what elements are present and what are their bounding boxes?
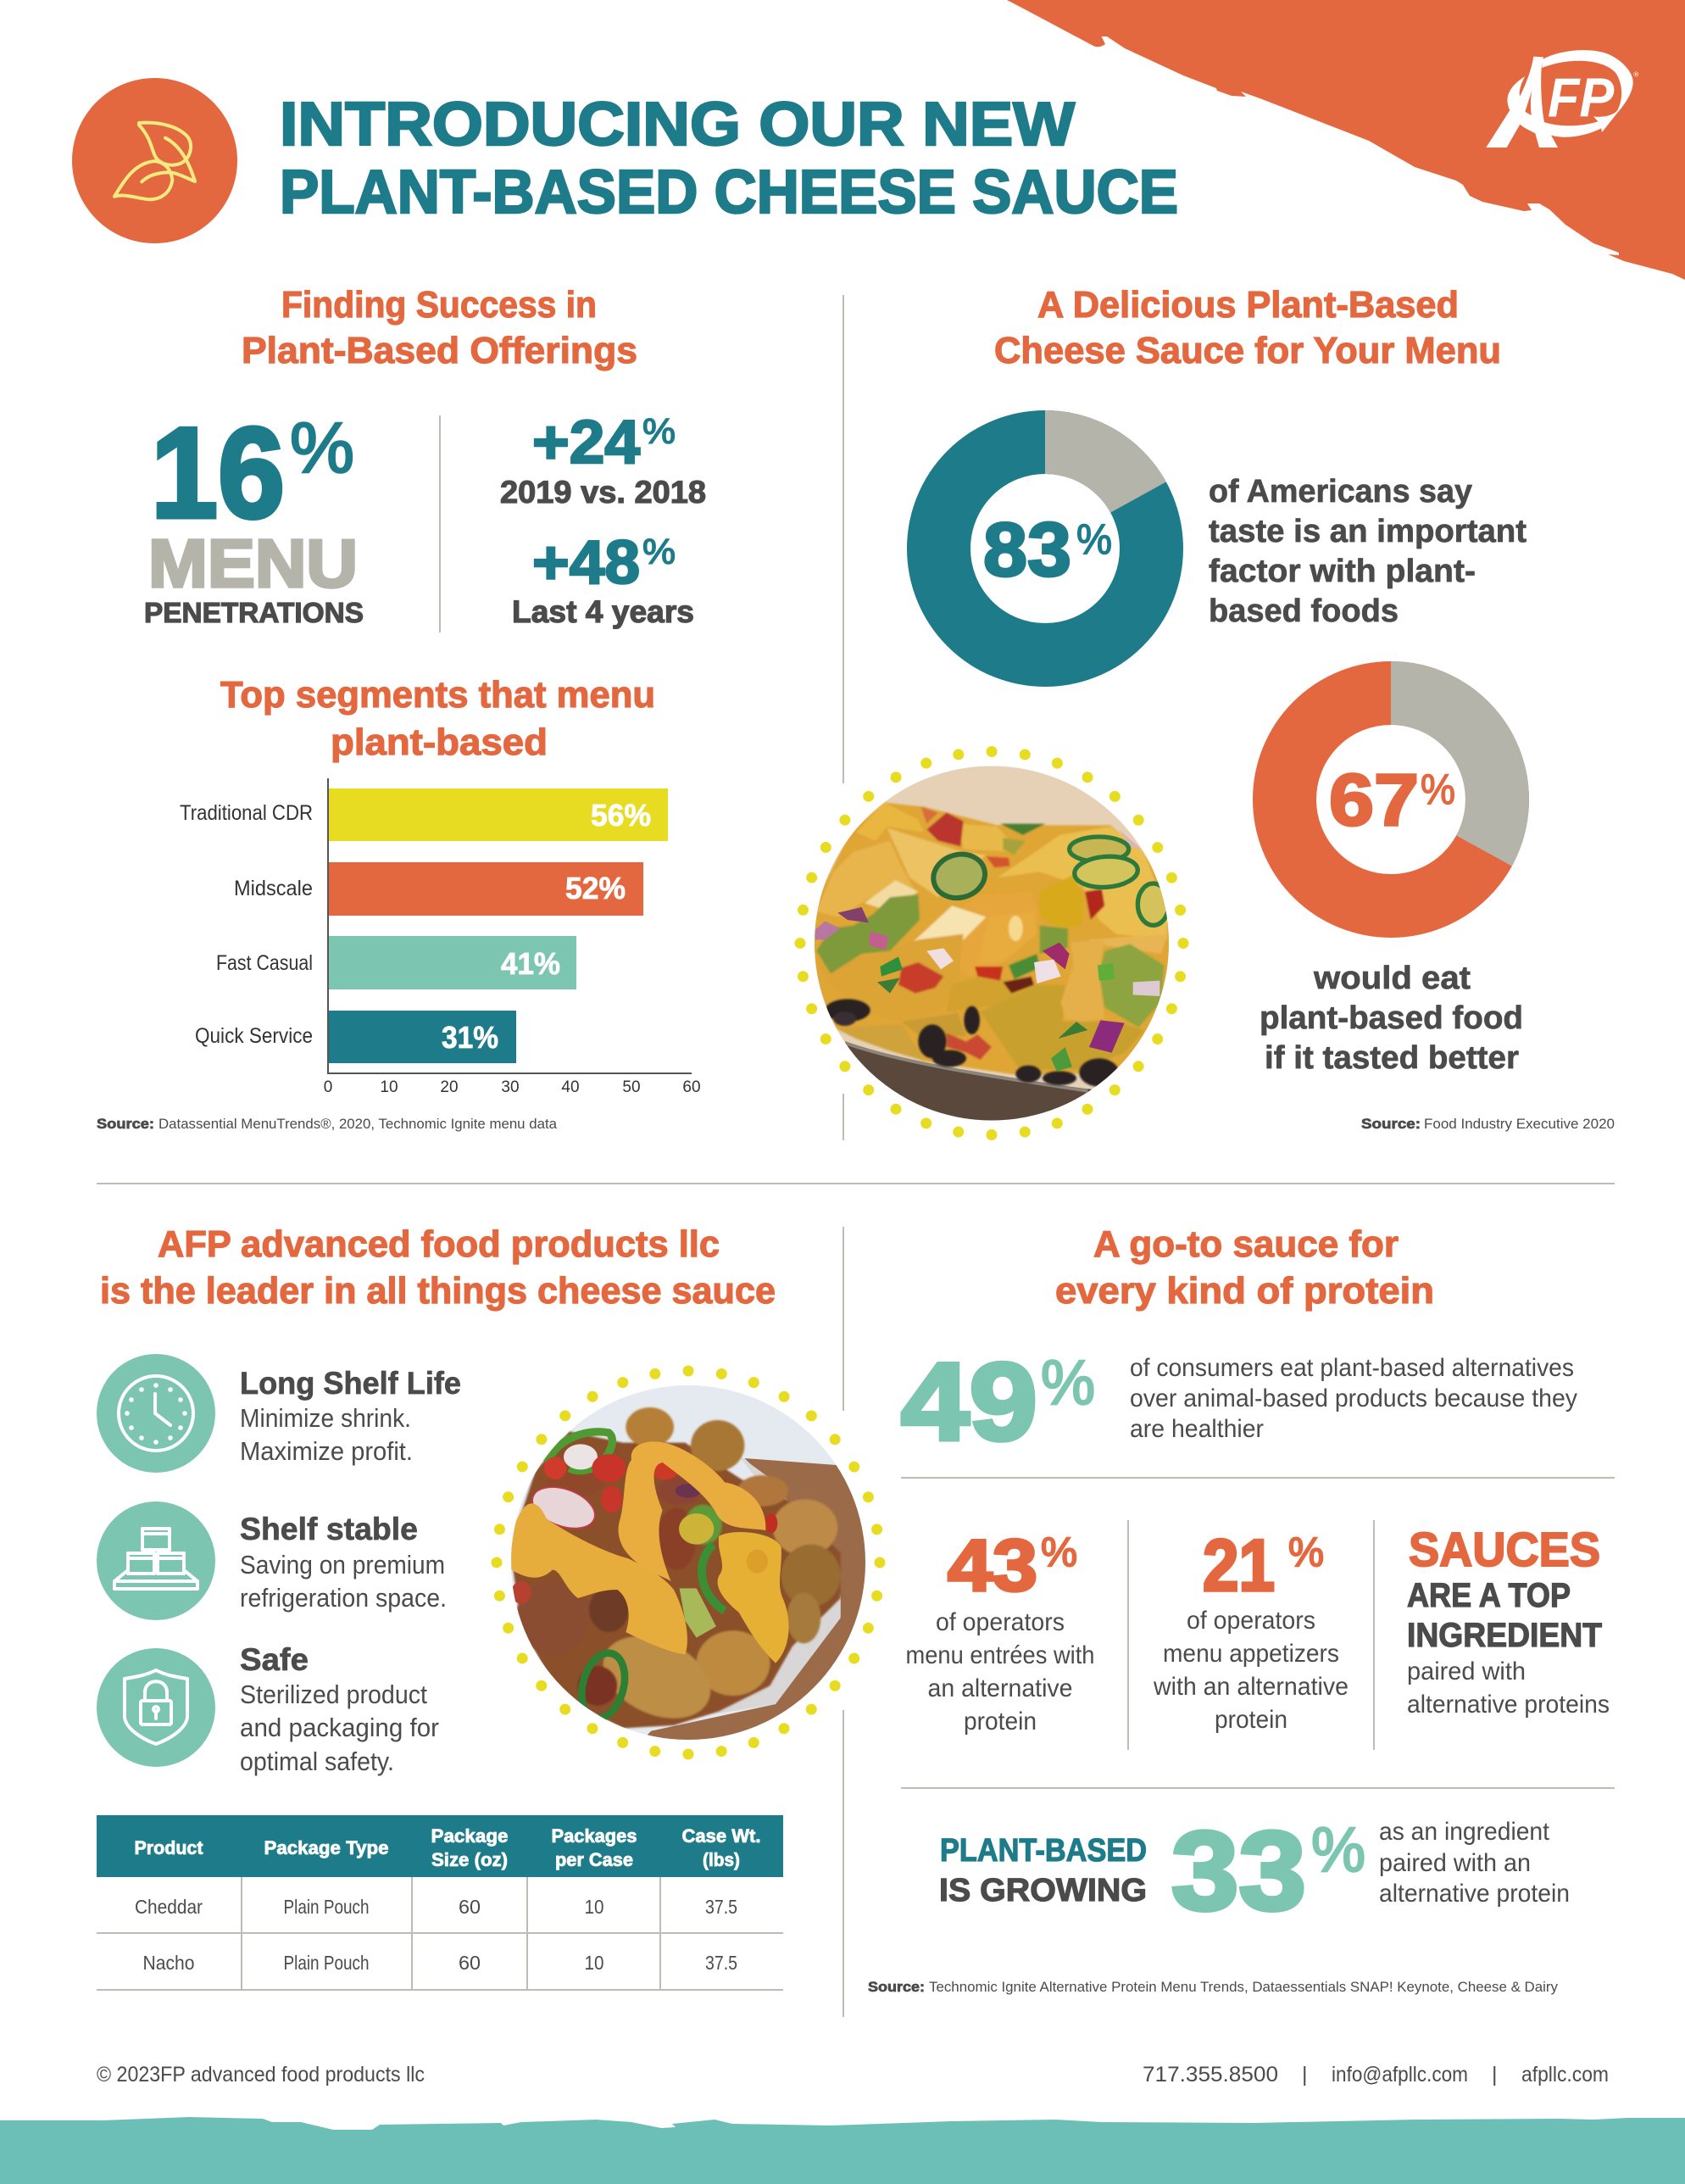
logo: AFP: ®	[1633, 71, 1638, 79]
icon: shield with lock	[97, 1648, 215, 1767]
table rows: Nacho	[142, 1952, 195, 1974]
stat: +48%: %	[642, 532, 676, 571]
table rows: Plain Pouch	[283, 1896, 370, 1918]
orange torn corner banner	[1007, 0, 1685, 280]
stat: 16% menu penetrations: MENU	[148, 526, 358, 601]
table header: Size (oz)	[431, 1849, 508, 1870]
bar: quick service: Quick Service	[195, 1024, 313, 1048]
logo: AFP: FP	[1548, 66, 1615, 128]
text: shelf stable: Saving on premium	[240, 1550, 445, 1580]
teal torn footer band	[0, 2117, 1685, 2184]
stat: 49%: of consumers eat plant-based alternatives	[1130, 1354, 1574, 1382]
source: datassential: Source:	[97, 1116, 154, 1132]
donut chart: 67%: 67	[1329, 760, 1419, 841]
stat: plant-based 33%: 33	[1171, 1808, 1306, 1933]
heading: finding success: Finding Success in	[281, 284, 597, 326]
stat: +24%	[500, 409, 706, 510]
heading: AFP leader: is the leader in all things cheese sauce	[100, 1270, 776, 1312]
heading: AFP leader: AFP advanced food products llc	[158, 1223, 720, 1265]
heading: AFP leader	[100, 1223, 776, 1312]
bar: traditional CDR: Traditional CDR	[180, 801, 313, 825]
text: shelf stable: refrigeration space.	[240, 1583, 447, 1613]
text: safe: optimal safety.	[240, 1747, 394, 1776]
source: food industry: Food Industry Executive 2020	[1424, 1116, 1615, 1132]
table header: Product	[134, 1837, 203, 1858]
panel: top segments chart	[97, 674, 701, 1132]
donut chart: 67%: %	[1421, 766, 1455, 813]
stat: 49%: %	[1041, 1347, 1095, 1418]
text: would eat plant-based food	[1260, 961, 1523, 1076]
heading: go-to sauce	[1055, 1223, 1434, 1312]
heading: finding success: Plant-Based Offerings	[242, 330, 637, 371]
heading: top segments: plant-based	[331, 722, 548, 763]
stat: 21%: menu appetizers	[1163, 1640, 1339, 1668]
bar: fast casual	[216, 936, 576, 989]
stat: 16% menu penetrations: PENETRATIONS	[144, 597, 364, 628]
panel: delicious cheese sauce	[939, 284, 1615, 1132]
stat: 49%: over animal-based products because they	[1130, 1384, 1577, 1412]
plate and beans	[845, 1043, 1092, 1121]
table rows: 10	[585, 1952, 603, 1974]
table rows: 10	[585, 1896, 603, 1918]
text: would eat plant-based food: if it tasted better	[1265, 1040, 1519, 1076]
stat: 43%: menu entrées with	[905, 1641, 1095, 1669]
table header: Case Wt.	[681, 1825, 761, 1847]
chart axis ticks: 40	[561, 1078, 580, 1096]
title: INTRODUCING OUR NEW	[280, 91, 1075, 159]
donut chart: 83%	[939, 410, 1166, 655]
text: shelf stable: Shelf stable	[240, 1512, 418, 1546]
stat: plant-based 33%: PLANT-BASED	[940, 1833, 1147, 1869]
panel: go-to sauce for protein	[868, 1223, 1615, 1995]
text: americans say taste: taste is an important	[1209, 514, 1527, 549]
table rows: Cheddar	[135, 1896, 203, 1918]
stat: sauces top ingredient: ARE A TOP	[1407, 1577, 1571, 1614]
logo: AFP	[1486, 50, 1638, 148]
stat: 16% menu penetrations: 16	[151, 401, 285, 545]
table header: (lbs)	[703, 1849, 740, 1870]
text: would eat plant-based food: would eat	[1313, 961, 1471, 996]
table rows: 60	[459, 1952, 481, 1974]
table rows: Plain Pouch	[283, 1952, 370, 1974]
bar: quick service	[195, 1011, 516, 1063]
heading: go-to sauce: every kind of protein	[1055, 1270, 1434, 1312]
stat: sauces top ingredient: SAUCES	[1409, 1523, 1600, 1577]
stat: sauces top ingredient: paired with	[1407, 1658, 1526, 1685]
footer contact: afpllc.com	[1521, 2063, 1609, 2086]
text: would eat plant-based food: plant-based food	[1260, 1000, 1523, 1036]
footer copyright: © 2023FP advanced food products llc	[97, 2063, 425, 2086]
footer contact: |	[1302, 2063, 1307, 2086]
table rows: 37.5	[705, 1952, 737, 1974]
bar: traditional CDR: 56%	[591, 798, 651, 833]
table header: Package Type	[264, 1837, 388, 1858]
donut chart: 83%: 83	[983, 508, 1071, 593]
bar: fast casual: Fast Casual	[216, 951, 313, 975]
heading: top segments	[220, 674, 655, 763]
text: long shelf life: Long Shelf Life	[240, 1366, 461, 1401]
stat: plant-based 33%: as an ingredient	[1379, 1818, 1550, 1846]
stat: 21%: %	[1288, 1530, 1324, 1575]
text: americans say taste: based foods	[1209, 593, 1399, 629]
bar: traditional CDR	[180, 788, 668, 841]
table rows: 60	[459, 1896, 481, 1918]
stat: plant-based 33%: IS GROWING	[939, 1873, 1147, 1908]
donut chart: 67%	[1285, 661, 1529, 905]
icon: stacked jars	[97, 1502, 215, 1620]
chart axis ticks: 0	[324, 1078, 332, 1096]
stat: 21%: of operators	[1187, 1607, 1315, 1635]
table header: Packages	[551, 1825, 637, 1847]
panel: finding success	[144, 284, 706, 632]
source: food industry: Source:	[1361, 1116, 1421, 1132]
stat: 49%: are healthier	[1130, 1415, 1264, 1443]
stat: 21%: protein	[1215, 1706, 1287, 1734]
text: long shelf life: Maximize profit.	[240, 1436, 413, 1466]
stat: 43%: of operators	[936, 1608, 1065, 1636]
chart axis ticks: 10	[380, 1078, 398, 1096]
bar: midscale: 52%	[565, 871, 626, 905]
source: datassential: Datassential MenuTrends®, 2020, Technomic Ignite menu data	[158, 1116, 558, 1132]
text: americans say taste: of Americans say	[1209, 474, 1472, 510]
footer contact: info@afpllc.com	[1332, 2063, 1468, 2086]
table rows: 37.5	[705, 1896, 737, 1918]
stat: 21%: with an alternative	[1153, 1673, 1349, 1701]
table header: Package	[431, 1825, 509, 1847]
icon: clock	[97, 1354, 215, 1473]
footer contact	[1143, 2063, 1609, 2086]
text: shelf stable	[240, 1512, 447, 1613]
photo: crispy bites with dotted ring	[497, 1371, 880, 1754]
heading: delicious sauce	[994, 284, 1501, 371]
stat: 43%: %	[1041, 1530, 1077, 1575]
text: americans say taste	[1209, 474, 1527, 629]
chart axis ticks: 30	[501, 1078, 520, 1096]
title: PLANT-BASED CHEESE SAUCE	[280, 159, 1178, 226]
title	[280, 91, 1178, 226]
stat: 16% menu penetrations	[144, 401, 364, 628]
stat: 49%: 49	[901, 1340, 1037, 1463]
stat: 16% menu penetrations: %	[290, 408, 354, 488]
product table	[97, 1815, 783, 1990]
table header: per Case	[555, 1849, 633, 1870]
stat: 21%: 21	[1203, 1525, 1275, 1607]
bar: midscale	[234, 862, 643, 916]
stat: +24%: 2019 vs. 2018	[500, 475, 706, 510]
donut chart: 83%: %	[1076, 515, 1112, 563]
chart axis ticks	[324, 1078, 701, 1096]
bar: midscale: Midscale	[234, 877, 313, 900]
bar chart	[180, 778, 701, 1096]
stat: 49%	[901, 1340, 1577, 1463]
stat: 21%	[1153, 1525, 1349, 1734]
heading: go-to sauce: A go-to sauce for	[1093, 1223, 1399, 1265]
stat: plant-based 33%: alternative protein	[1379, 1880, 1570, 1908]
text: long shelf life	[240, 1366, 461, 1466]
photo: nachos with dotted ring	[800, 751, 1183, 1134]
stat: +24%: %	[642, 411, 676, 451]
text: safe	[240, 1642, 439, 1776]
stat: +24%: +24	[532, 409, 640, 476]
stat: 43%: protein	[964, 1708, 1037, 1736]
stat: 43%: an alternative	[927, 1674, 1073, 1702]
text: americans say taste: factor with plant-	[1209, 554, 1476, 589]
chart axis ticks: 50	[622, 1078, 641, 1096]
text: safe: Sterilized product	[240, 1680, 427, 1709]
bar: quick service: 31%	[442, 1020, 498, 1055]
chart axis ticks: 20	[440, 1078, 459, 1096]
source: technomic: Technomic Ignite Alternative Protein Menu Trends, Dataessentials SNAP! Keynote, Cheese & Dairy	[929, 1979, 1558, 1995]
chart axis ticks: 60	[682, 1078, 701, 1096]
bar: fast casual: 41%	[501, 946, 560, 981]
footer contact: |	[1492, 2063, 1497, 2086]
heading: top segments: Top segments that menu	[220, 674, 655, 716]
stat: sauces top ingredient: alternative proteins	[1407, 1691, 1610, 1719]
stat: sauces top ingredient: INGREDIENT	[1407, 1617, 1602, 1654]
icon: orange circle with leaves	[72, 78, 237, 243]
table header	[134, 1825, 761, 1870]
stat: +48%: Last 4 years	[512, 594, 694, 629]
heading: delicious sauce: A Delicious Plant-Based	[1037, 284, 1459, 326]
source: technomic: Source:	[868, 1979, 925, 1995]
stat: plant-based 33%	[939, 1808, 1570, 1933]
stat: +48%	[512, 529, 694, 629]
stat: plant-based 33%: paired with an	[1379, 1849, 1531, 1877]
footer contact: 717.355.8500	[1143, 2063, 1278, 2086]
stat: 43%: 43	[948, 1525, 1037, 1607]
stat: +48%: +48	[532, 529, 640, 597]
heading: delicious sauce: Cheese Sauce for Your Menu	[994, 330, 1501, 371]
heading: finding success	[242, 284, 637, 371]
stat: sauces top ingredient	[1407, 1523, 1610, 1719]
table rows	[135, 1896, 737, 1974]
text: safe: Safe	[240, 1642, 309, 1677]
panel: AFP leader	[97, 1223, 880, 1990]
stat: 43%	[905, 1525, 1095, 1736]
text: safe: and packaging for	[240, 1713, 439, 1742]
text: long shelf life: Minimize shrink.	[240, 1403, 411, 1433]
stat: plant-based 33%: %	[1311, 1814, 1365, 1885]
